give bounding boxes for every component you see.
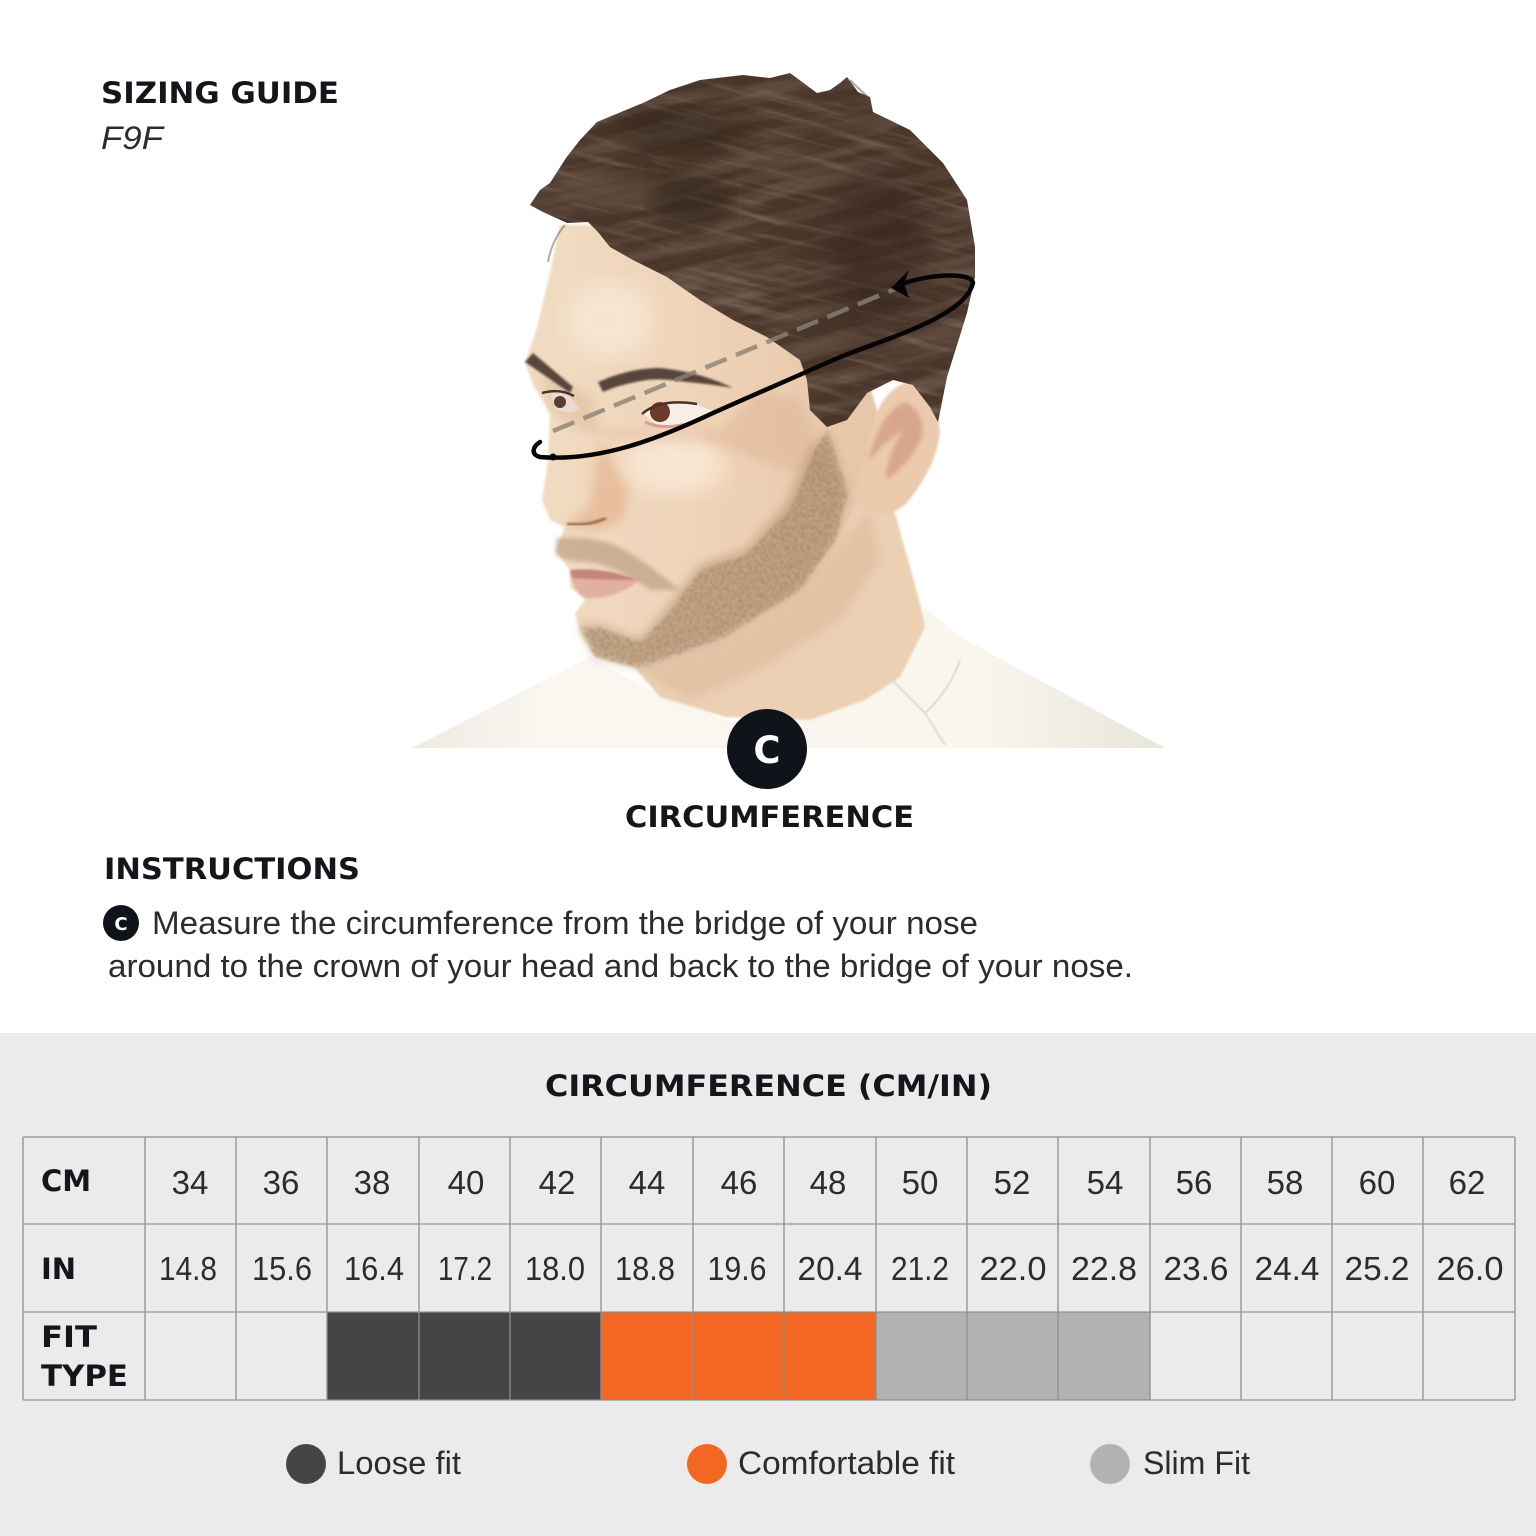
cm values: 34 — [172, 1164, 208, 1201]
inch values — [159, 1250, 1504, 1287]
cm values: 54 — [1087, 1164, 1123, 1201]
shirt — [412, 607, 1165, 748]
cm values: 62 — [1449, 1164, 1485, 1201]
cm values: 60 — [1359, 1164, 1395, 1201]
cm values: 36 — [263, 1164, 299, 1201]
eyebrows — [525, 353, 733, 393]
cm values — [172, 1164, 1485, 1201]
cm values: 38 — [354, 1164, 390, 1201]
instructions text: C — [114, 914, 128, 935]
fit type fills — [327, 1312, 1150, 1400]
measuring line: circumference loop with arrow — [534, 270, 973, 460]
lips — [570, 569, 640, 598]
inch values: 26.0 — [1436, 1250, 1504, 1287]
title: sizing guide — [101, 76, 339, 156]
panel: sizing table — [0, 1033, 1536, 1536]
legend: Slim Fit — [1143, 1445, 1250, 1481]
ear — [856, 383, 940, 515]
row labels: IN — [41, 1252, 76, 1286]
nose shading — [565, 440, 628, 530]
inch values: 16.4 — [344, 1250, 404, 1287]
instructions text: Measure the circumference from the bridge of your nose — [152, 905, 978, 941]
cm values: 42 — [539, 1164, 575, 1201]
instructions text — [103, 905, 1133, 984]
instructions text: around to the crown of your head and back to the bridge of your nose. — [108, 948, 1133, 984]
cm values: 56 — [1176, 1164, 1212, 1201]
cm values: 50 — [902, 1164, 938, 1201]
forehead highlight — [565, 282, 655, 358]
inch values: 25.2 — [1344, 1250, 1410, 1287]
cm values: 48 — [810, 1164, 846, 1201]
heading: circumference: CIRCUMFERENCE — [625, 800, 914, 834]
cm values: 40 — [448, 1164, 484, 1201]
title: sizing guide: F9F — [101, 120, 166, 156]
legend: Comfortable fit — [738, 1445, 955, 1481]
brow and eye socket shading — [540, 370, 830, 480]
instructions heading: INSTRUCTIONS — [104, 852, 360, 886]
row labels: TYPE — [41, 1359, 128, 1393]
neck — [635, 480, 925, 720]
inch values: 17.2 — [438, 1250, 492, 1287]
inch values: 22.8 — [1071, 1250, 1137, 1287]
row labels: CM — [41, 1164, 91, 1198]
inch values: 21.2 — [891, 1250, 949, 1287]
inch values: 20.4 — [798, 1250, 862, 1287]
hair — [530, 73, 975, 427]
inch values: 22.0 — [980, 1250, 1046, 1287]
eyes — [542, 391, 713, 428]
inch values: 19.6 — [708, 1250, 766, 1287]
inch values: 18.0 — [525, 1250, 585, 1287]
inch values: 24.4 — [1254, 1250, 1320, 1287]
cm values: 46 — [721, 1164, 757, 1201]
legend: Loose fit — [337, 1445, 461, 1481]
illustration: man's head in profile — [412, 73, 1165, 748]
row labels: FIT — [41, 1320, 97, 1354]
badge: C: C — [753, 729, 781, 772]
inch values: 23.6 — [1164, 1250, 1228, 1287]
row labels — [41, 1164, 128, 1393]
beard — [556, 430, 848, 668]
cm values: 58 — [1267, 1164, 1303, 1201]
cm values: 52 — [994, 1164, 1030, 1201]
title: sizing guide: SIZING GUIDE — [101, 76, 339, 110]
cheek highlight — [625, 435, 725, 495]
table heading: CIRCUMFERENCE (CM/IN) — [545, 1069, 992, 1103]
cm values: 44 — [629, 1164, 665, 1201]
face — [525, 225, 880, 668]
inch values: 15.6 — [252, 1250, 312, 1287]
legend — [286, 1444, 1250, 1484]
inch values: 18.8 — [615, 1250, 675, 1287]
hair wisps — [548, 80, 868, 262]
badge: C — [727, 709, 807, 789]
inch values: 14.8 — [159, 1250, 217, 1287]
